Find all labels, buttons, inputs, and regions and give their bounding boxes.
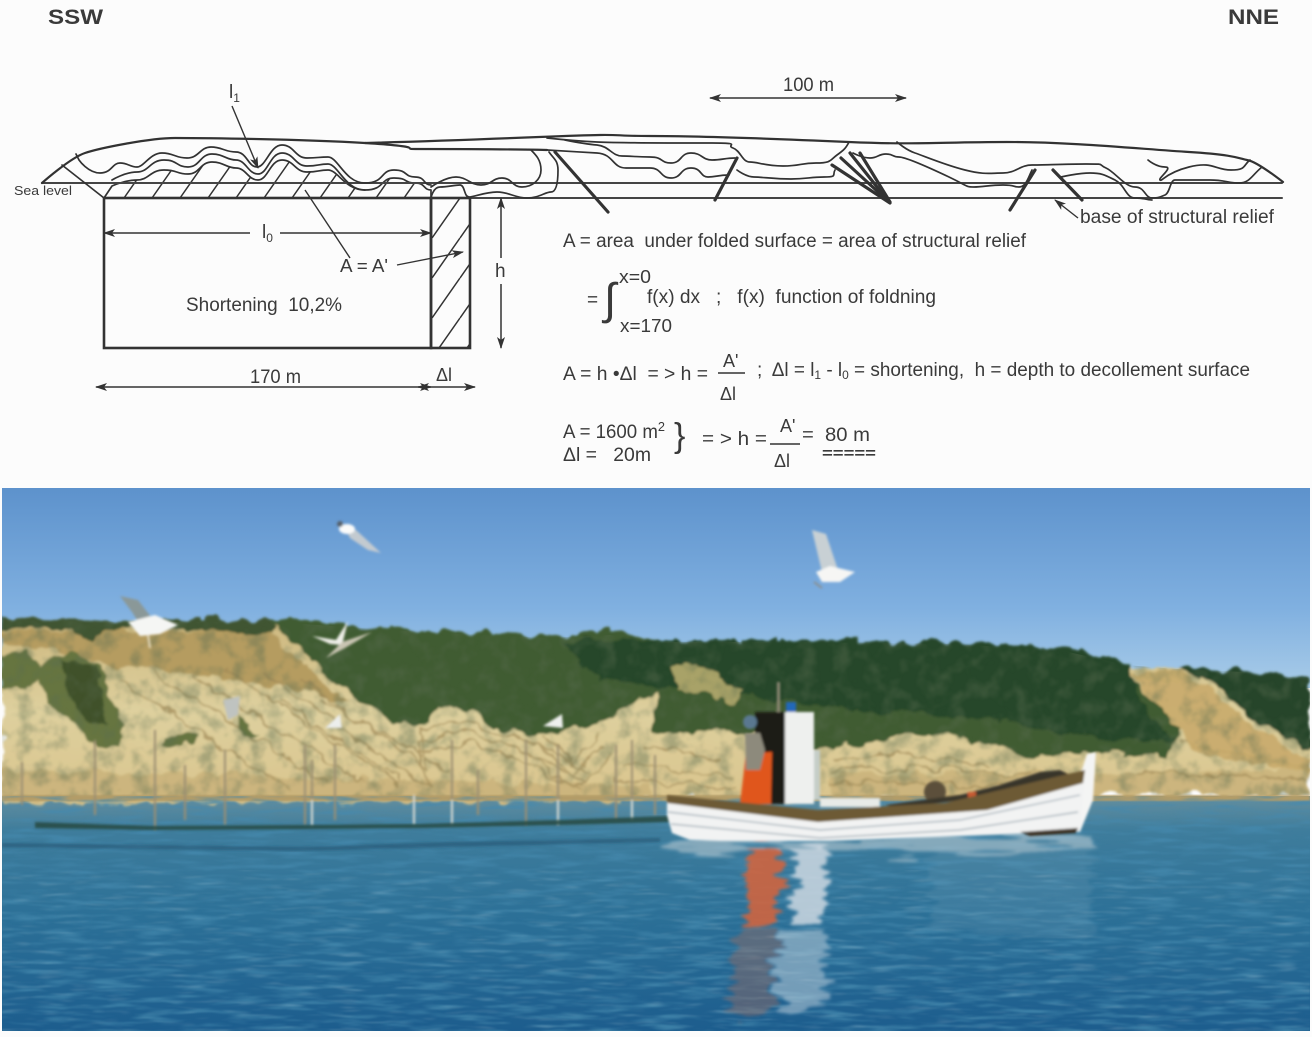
formula: numerical result: A'	[780, 416, 795, 436]
hatched area of structural relief	[104, 160, 431, 198]
cliff mottling	[2, 615, 1310, 805]
vegetation: right crest	[1176, 667, 1310, 750]
heading: NNE: NNE	[1228, 6, 1279, 29]
formula: numerical result: = 80 m	[802, 425, 870, 446]
formula: shortening relation: - l	[821, 360, 842, 381]
formula: numerical result: Δl = 20m	[563, 445, 651, 466]
formula: shortening relation: ; Δl = l	[757, 360, 815, 381]
label: base of structural relief	[1055, 200, 1275, 228]
formula: integral: x=170	[620, 316, 672, 336]
formula: numerical result	[563, 416, 876, 471]
formula: shortening relation: A'	[723, 351, 738, 371]
dimension: depth h: h	[495, 261, 506, 282]
water texture	[2, 796, 1310, 1036]
text: area definition: A = area under folded surface = area of structural relief	[563, 231, 1027, 252]
keel shadow	[1020, 828, 1078, 836]
formula: numerical result: 2	[658, 419, 665, 434]
chart: folded strata section	[42, 135, 1283, 200]
label: shortening: Shortening 10,2%	[186, 295, 342, 316]
perched gulls	[223, 696, 240, 720]
formula: numerical result: = > h =	[702, 429, 767, 450]
label: l1 with leader: 1	[233, 91, 240, 105]
seagulls	[120, 521, 855, 728]
rectangle: restored block	[104, 198, 470, 348]
vegetation: left crest	[2, 618, 275, 640]
formula: shortening relation: Δl	[720, 384, 736, 404]
low deck housing	[820, 798, 880, 807]
wheelhouse	[755, 712, 791, 804]
panel: photograph of folded coastal cliff	[2, 488, 1310, 1036]
heading: SSW: SSW	[48, 6, 103, 29]
formula: integral: x=0	[619, 267, 651, 287]
vegetation: central mass	[269, 620, 1180, 757]
formula: numerical result: Δl	[774, 451, 790, 471]
scale bar: 100 m: 100 m	[783, 75, 834, 96]
fishing net stakes	[22, 730, 655, 830]
folded beds, right	[853, 153, 1032, 187]
deck load	[885, 770, 1070, 808]
submerged net	[2, 816, 670, 851]
formula: shortening relation: 1	[814, 368, 821, 382]
dimension: l0: l	[262, 222, 266, 243]
fishing boat	[667, 682, 1096, 841]
shoreline	[2, 795, 1310, 801]
mast	[777, 682, 780, 714]
formula: shortening relation	[563, 351, 1250, 404]
faults	[555, 152, 1082, 212]
fisherman in orange overalls	[740, 715, 772, 804]
label: Sea level: Sea level	[14, 183, 72, 198]
vegetation: left slope patches	[2, 650, 262, 748]
label: base of structural relief: base of structural relief	[1080, 207, 1275, 228]
formula: shortening relation: 0	[842, 368, 849, 382]
stem post	[1074, 750, 1098, 834]
blue light	[786, 702, 796, 712]
sand patch	[671, 663, 745, 705]
gull top right	[812, 530, 855, 588]
formula: integral	[587, 267, 936, 336]
dimension: delta l	[418, 365, 475, 387]
label: l1 with leader	[229, 82, 258, 168]
dimension: 170 m: 170 m	[250, 367, 301, 388]
dimension: depth h	[490, 198, 512, 348]
boat reflection	[670, 836, 1093, 1020]
cliff strata	[120, 668, 1310, 792]
sea	[2, 796, 1310, 1036]
formula: integral: f(x) dx ; f(x) function of foldning	[647, 287, 936, 308]
label: l1 with leader: l	[229, 82, 233, 103]
cliff and vegetation	[2, 618, 1310, 804]
formula: numerical result: A = 1600 m	[563, 422, 660, 443]
gull lower centre	[312, 621, 372, 658]
dimension: l0: 0	[266, 231, 273, 245]
gunwale	[667, 770, 1085, 822]
dimension: delta l: Δl	[436, 365, 452, 385]
formula: numerical result: }	[674, 417, 685, 455]
formula: numerical result: =====	[822, 445, 876, 462]
gull left over crest	[120, 596, 178, 648]
white hull	[667, 780, 1085, 841]
sea level and base lines	[42, 183, 1282, 198]
panel: structural cross-section diagram	[14, 6, 1283, 471]
vegetation: dark crest	[560, 640, 1175, 740]
sky	[2, 488, 1310, 688]
formula: integral: =	[587, 290, 598, 311]
folded beds, centre	[431, 150, 541, 187]
sandy cliff face	[2, 620, 1310, 804]
label: A = A' with leaders	[305, 190, 463, 276]
brown cliff top	[2, 630, 350, 705]
formula: shortening relation: A = h •Δl = > h =	[563, 364, 708, 385]
gull top left	[337, 521, 381, 553]
second fisherman	[924, 781, 946, 803]
label: A = A' with leaders: A = A'	[340, 256, 388, 276]
shaded base of cliff	[2, 770, 1310, 802]
topographic surface	[42, 135, 1283, 183]
formula: shortening relation: = shortening, h = depth to decollement surface	[849, 360, 1250, 381]
brown upper slope right	[1128, 670, 1310, 776]
dimension: l0	[104, 222, 431, 245]
folded beds, left block	[76, 145, 431, 185]
formula: integral: ∫	[601, 275, 619, 324]
hull planks	[668, 795, 1080, 838]
